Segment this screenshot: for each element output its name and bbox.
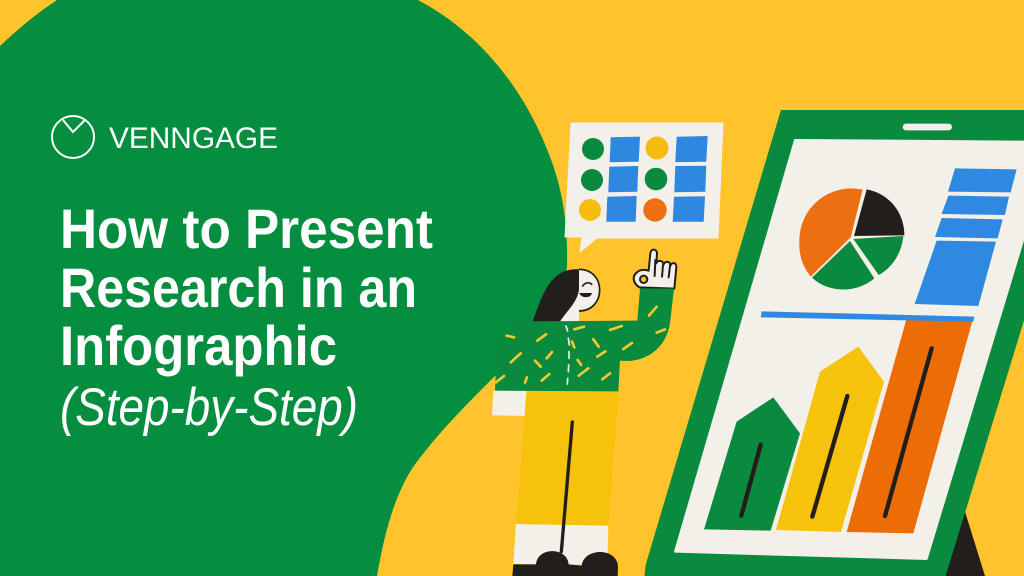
speech bubble with grid: [565, 123, 723, 252]
grid circles: [579, 136, 668, 222]
eyebrow: [583, 283, 592, 286]
tablet with charts: [645, 111, 1024, 576]
bar: yellow: [776, 347, 884, 532]
icon: logo clock: [52, 116, 94, 158]
tablet stand: [945, 512, 985, 576]
bar: green: [704, 397, 800, 531]
grid blue cells: [606, 136, 708, 222]
tablet button: [903, 124, 952, 130]
sweater seam: [566, 326, 569, 384]
hair: [533, 269, 579, 322]
logo: Venngage: [52, 116, 278, 158]
eye: [579, 293, 592, 297]
pants: [516, 389, 619, 526]
blue divider line: [761, 311, 974, 322]
tablet body: [645, 111, 1024, 576]
pants crease: [561, 422, 572, 552]
bubble: [565, 123, 723, 252]
brand name: VENNGAGE: [109, 122, 278, 155]
person pointing: [492, 250, 676, 576]
sweater speckles: [496, 307, 665, 383]
title: Infographic: [60, 314, 337, 377]
shoes: [512, 551, 618, 576]
sweater: [495, 288, 674, 391]
bar chart: [704, 318, 973, 533]
bar: orange: [847, 318, 973, 533]
socks: [513, 524, 608, 565]
hand details: [640, 260, 670, 283]
green blob panel: [0, 0, 567, 576]
bar lines: [741, 348, 932, 517]
title: How to Present: [60, 197, 433, 260]
blue legend bars: [915, 168, 1017, 306]
pie chart: [799, 188, 904, 289]
left cuff: [492, 391, 527, 416]
title: [60, 197, 433, 437]
tablet screen: [675, 140, 1024, 559]
title: Research in an: [60, 256, 417, 319]
hand: [634, 250, 676, 289]
face: [560, 269, 600, 322]
title: (Step-by-Step): [60, 378, 358, 437]
